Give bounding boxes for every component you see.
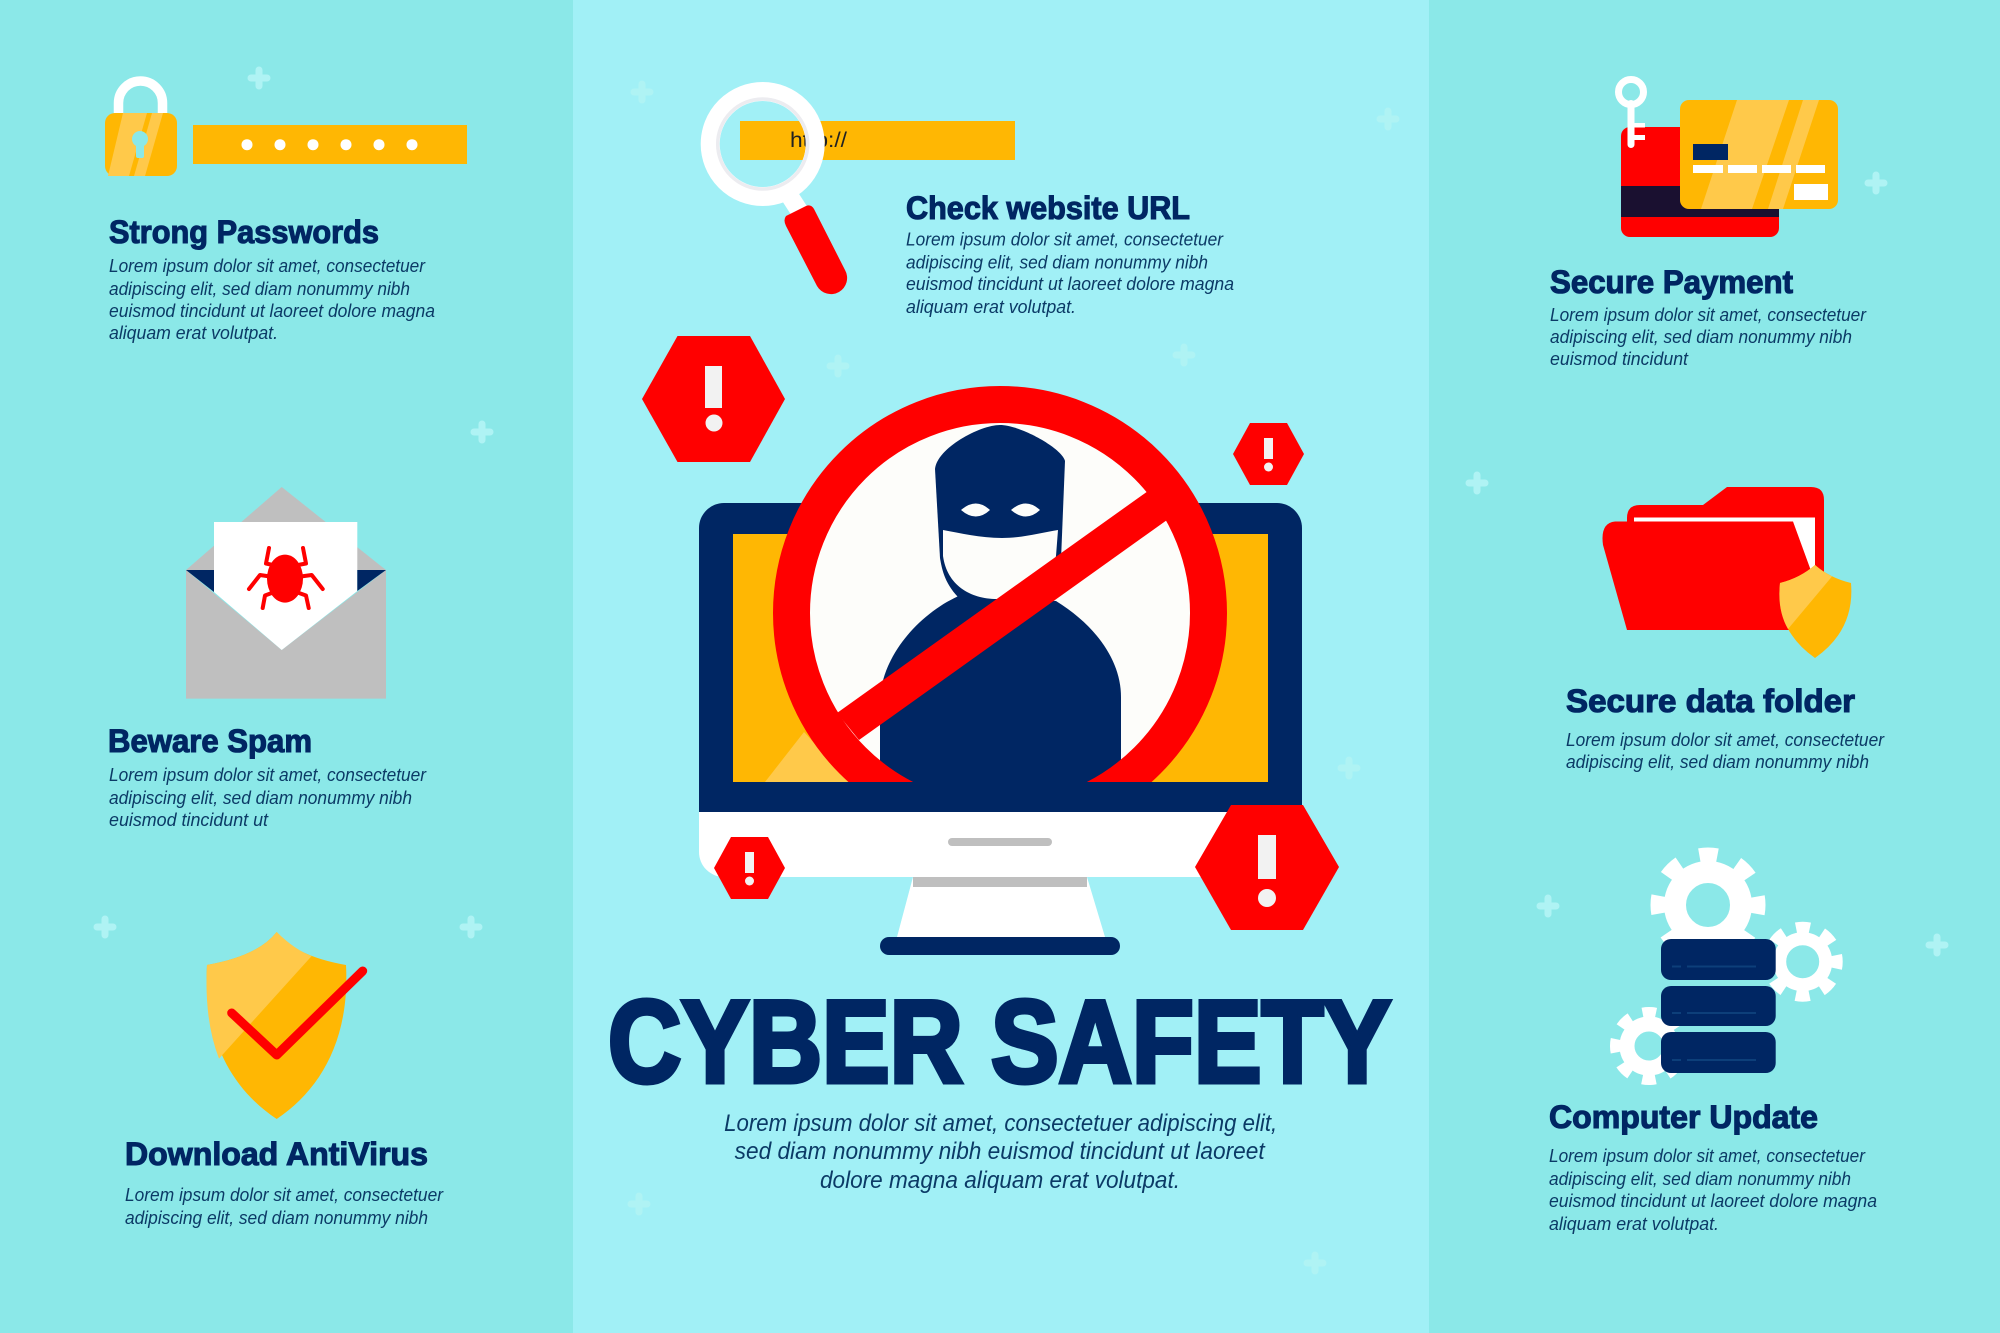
text block: Lorem ipsum dolor sit amet, consectetuer bbox=[906, 228, 1224, 250]
text block: Lorem ipsum dolor sit amet, consectetuer bbox=[1550, 304, 1867, 325]
heading: Download AntiVirus bbox=[125, 1136, 428, 1172]
icon: key and credit cards bbox=[1618, 80, 1838, 237]
text block: Lorem ipsum dolor sit amet, consectetuer bbox=[125, 1184, 444, 1205]
warning hexagon bbox=[714, 837, 785, 899]
panel: secure payment bbox=[1550, 80, 1871, 369]
text block: aliquam erat volutpat. bbox=[109, 322, 278, 343]
panel: computer update bbox=[1549, 855, 1882, 1234]
icon: url bar and magnifier: http:// bbox=[790, 129, 847, 152]
text block: adipiscing elit, sed diam nonummy nibh bbox=[1566, 751, 1869, 772]
title: CYBER SAFETY bbox=[608, 976, 1391, 1107]
text block: euismod tincidunt ut laoreet dolore magna bbox=[1549, 1190, 1877, 1211]
hacker figure bbox=[880, 425, 1121, 790]
warning hexagon bbox=[1195, 805, 1339, 930]
password field bbox=[193, 125, 467, 164]
prohibition ring bbox=[792, 404, 1208, 822]
heading: Computer Update bbox=[1549, 1099, 1818, 1135]
panel: check website url bbox=[710, 92, 1239, 317]
text block: euismod tincidunt ut laoreet dolore magna bbox=[906, 273, 1234, 294]
text block: adipiscing elit, sed diam nonummy nibh bbox=[125, 1207, 428, 1228]
icon: folder with shield bbox=[1602, 487, 1851, 658]
panel: download antivirus bbox=[125, 932, 448, 1228]
heading: Secure data folder bbox=[1566, 683, 1855, 719]
central illustration: monitor with blocked hacker bbox=[642, 336, 1339, 955]
panel: secure data folder bbox=[1566, 487, 1889, 772]
warning hexagon bbox=[1233, 423, 1304, 485]
text block: Lorem ipsum dolor sit amet, consectetuer bbox=[1566, 729, 1885, 750]
icon: url bar and magnifier bbox=[710, 92, 1015, 294]
heading: Beware Spam bbox=[108, 723, 312, 759]
text block: Lorem ipsum dolor sit amet, consectetuer bbox=[1549, 1145, 1866, 1166]
panel: strong passwords bbox=[105, 81, 467, 343]
text block: aliquam erat volutpat. bbox=[1549, 1213, 1719, 1234]
icon: envelope with bug bbox=[186, 487, 386, 699]
text block: adipiscing elit, sed diam nonummy nibh bbox=[109, 278, 410, 299]
panel: beware spam bbox=[108, 487, 431, 830]
text block: adipiscing elit, sed diam nonummy nibh bbox=[1550, 326, 1852, 347]
intro text block: sed diam nonummy nibh euismod tincidunt ut laoreet bbox=[735, 1138, 1266, 1165]
text block: adipiscing elit, sed diam nonummy nibh bbox=[109, 787, 412, 808]
prohibition slash bbox=[837, 491, 1167, 740]
text block: euismod tincidunt bbox=[1550, 348, 1689, 369]
warning hexagon bbox=[642, 336, 785, 462]
heading: Secure Payment bbox=[1550, 264, 1793, 300]
monitor bbox=[699, 503, 1302, 955]
icon: gears and server stack bbox=[1616, 855, 1837, 1079]
intro text block: Lorem ipsum dolor sit amet, consectetuer adipiscing elit, bbox=[724, 1110, 1277, 1137]
white disc behind figure bbox=[810, 423, 1190, 760]
icon: padlock bbox=[105, 81, 177, 176]
intro text block: dolore magna aliquam erat volutpat. bbox=[820, 1167, 1180, 1194]
heading: Strong Passwords bbox=[109, 214, 379, 250]
text block: Lorem ipsum dolor sit amet, consectetuer bbox=[109, 255, 426, 276]
heading: Check website URL bbox=[906, 190, 1190, 226]
text block: adipiscing elit, sed diam nonummy nibh bbox=[906, 252, 1208, 272]
text block: Lorem ipsum dolor sit amet, consectetuer bbox=[109, 764, 427, 785]
text block: adipiscing elit, sed diam nonummy nibh bbox=[1549, 1168, 1851, 1189]
text block: aliquam erat volutpat. bbox=[906, 296, 1076, 317]
text block: euismod tincidunt ut laoreet dolore magna bbox=[109, 300, 435, 321]
icon: shield with check bbox=[206, 932, 363, 1119]
text block: euismod tincidunt ut bbox=[109, 809, 269, 830]
